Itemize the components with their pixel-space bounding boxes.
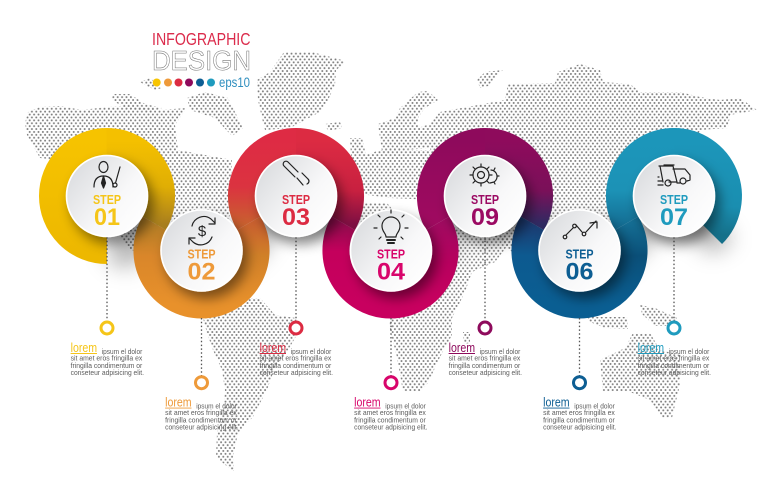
step discs xyxy=(66,156,714,291)
text block 5: sit amet eros fringilla ex xyxy=(449,354,521,363)
ribbon segment: step 6 blue xyxy=(525,223,634,305)
step label: STEP xyxy=(188,248,216,262)
text block 2: ipsum el dolor xyxy=(196,401,237,410)
text block 2: sit amet eros fringilla ex xyxy=(165,408,237,417)
text block 7: ipsum el dolor xyxy=(669,347,710,356)
text block 2 xyxy=(165,396,238,432)
text block 3: fringilla condimentum or xyxy=(260,361,332,370)
ribbon segment: step 5 purple xyxy=(430,141,540,223)
icon: dollar cycle: $ xyxy=(198,223,207,240)
text block 1: fringilla condimentum or xyxy=(71,361,143,370)
text block 6: lorem xyxy=(543,396,570,410)
icon: delivery truck xyxy=(658,165,690,186)
text block 4: sit amet eros fringilla ex xyxy=(354,408,426,417)
ribbon segment: step 2 orange xyxy=(147,223,256,305)
text block 1: ipsum el dolor xyxy=(102,347,143,356)
text block 6 xyxy=(543,396,616,432)
icon: teacher with pointer xyxy=(94,162,120,188)
text block 4: fringilla condimentum or xyxy=(354,416,426,425)
step label: STEP xyxy=(282,193,310,207)
text block 3 xyxy=(260,341,333,377)
text block 5: fringilla condimentum or xyxy=(449,361,521,370)
colour dots xyxy=(153,78,215,86)
step number: 02 xyxy=(188,258,216,286)
text block 1: sit amet eros fringilla ex xyxy=(71,354,143,363)
title line: DESIGN: DESIGN xyxy=(152,45,251,76)
text block 1: lorem xyxy=(71,341,97,355)
step 7 content xyxy=(658,165,690,231)
step label: STEP xyxy=(566,248,594,262)
icon: broken link xyxy=(283,161,309,185)
step number: 07 xyxy=(660,204,688,231)
step number: 04 xyxy=(377,258,406,286)
pin markers xyxy=(101,322,680,389)
step 1 content xyxy=(93,162,121,231)
eps label: eps10 xyxy=(219,75,250,90)
text block 7 xyxy=(638,341,711,377)
text block 4: ipsum el dolor xyxy=(385,401,426,410)
title xyxy=(152,29,251,90)
step 2 content xyxy=(188,217,216,286)
text block 1: conseteur adpisicing elit. xyxy=(71,368,144,377)
step number: 09 xyxy=(471,204,499,231)
text block 6: ipsum el dolor xyxy=(574,401,615,410)
step 4 content xyxy=(374,210,408,286)
text block 7: fringilla condimentum or xyxy=(638,361,710,370)
ribbon segment: step 7 teal xyxy=(619,141,728,234)
text block 2: conseteur adpisicing elit. xyxy=(165,423,238,432)
text block 3: ipsum el dolor xyxy=(291,347,332,356)
text block 7: lorem xyxy=(638,341,664,355)
step label: STEP xyxy=(377,248,405,262)
icon: light bulb xyxy=(374,210,408,243)
step label: STEP xyxy=(660,193,688,207)
text block 6: conseteur adpisicing elit. xyxy=(543,423,616,432)
text block 5 xyxy=(449,341,522,377)
ribbon segment: step 3 red xyxy=(241,141,351,223)
text block 4 xyxy=(354,396,428,432)
ribbon xyxy=(52,141,728,305)
text block 5: conseteur adpisicing elit. xyxy=(449,368,522,377)
step 5 content xyxy=(470,164,499,231)
text block 6: fringilla condimentum or xyxy=(543,416,615,425)
text block 1 xyxy=(71,341,144,377)
step label: STEP xyxy=(93,193,121,207)
text block 7: sit amet eros fringilla ex xyxy=(638,354,710,363)
icon: line chart with arrow xyxy=(563,221,597,239)
ribbon segment: step 1 yellow xyxy=(52,141,162,250)
step 3 content xyxy=(282,161,310,231)
text block 4: lorem xyxy=(354,396,381,410)
text block 2: lorem xyxy=(165,396,192,410)
text block 2: fringilla condimentum or xyxy=(165,416,237,425)
step number: 01 xyxy=(94,204,120,231)
text block 3: lorem xyxy=(260,341,286,355)
step number: 06 xyxy=(566,258,594,286)
text block 3: conseteur adpisicing elit. xyxy=(260,368,333,377)
step label: STEP xyxy=(471,193,499,207)
connector dotted lines xyxy=(107,237,674,376)
text block 3: sit amet eros fringilla ex xyxy=(260,354,332,363)
text block 5: ipsum el dolor xyxy=(480,347,521,356)
text block 5: lorem xyxy=(449,341,475,355)
text block 4: conseteur adpisicing elit. xyxy=(354,423,428,432)
icon: gears xyxy=(470,164,499,186)
text block 6: sit amet eros fringilla ex xyxy=(543,408,615,417)
step number: 03 xyxy=(282,204,310,231)
text block 7: conseteur adpisicing elit. xyxy=(638,368,711,377)
step 6 content xyxy=(563,221,597,286)
soft ribbon shadow xyxy=(116,209,722,264)
ribbon segment: step 4 crimson xyxy=(336,223,445,305)
title line: INFOGRAPHIC: INFOGRAPHIC xyxy=(152,29,250,49)
